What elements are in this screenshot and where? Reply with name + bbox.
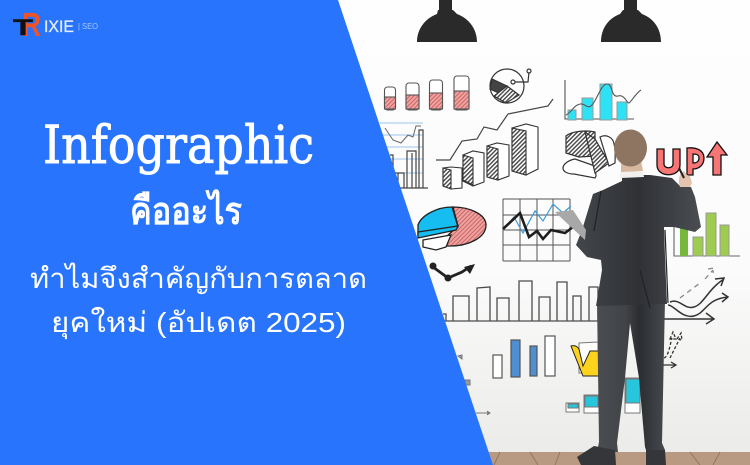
logo bbox=[13, 6, 98, 43]
heading: คืออะไร: คืออะไร bbox=[130, 189, 243, 233]
logo wordmark: IXIE bbox=[44, 17, 74, 36]
sketch trend arrows bbox=[662, 268, 728, 368]
clipboard bbox=[555, 210, 586, 240]
wood floor bbox=[480, 452, 750, 465]
hand holding marker bbox=[679, 171, 692, 187]
outlined bar chart bbox=[443, 281, 601, 321]
person in suit seen from behind bbox=[555, 130, 701, 465]
head bbox=[614, 130, 647, 166]
black squiggle arrow bbox=[430, 262, 475, 282]
icon: yellow folder bbox=[571, 342, 600, 376]
beakers chart bbox=[384, 76, 469, 110]
sketch pie chart with pointer bbox=[490, 69, 531, 103]
cyan bar chart with curve bbox=[565, 80, 641, 120]
sleeve crease bbox=[594, 191, 668, 308]
wall background bbox=[330, 0, 750, 453]
jacket bbox=[576, 175, 701, 306]
sketch grid line chart bbox=[503, 199, 573, 261]
logo mark: T bbox=[13, 15, 34, 40]
subheading line 2: ยุคใหม่ (อัปเดต 2025) bbox=[51, 306, 346, 340]
sketch 3D pie chart bbox=[563, 131, 615, 178]
small cyan blocks bbox=[566, 378, 640, 413]
legs bbox=[597, 300, 665, 452]
title: Infographic: Infographic bbox=[43, 116, 314, 176]
icon: ceiling lamp right bbox=[601, 0, 661, 42]
colored pie chart bbox=[418, 207, 486, 250]
logo divider and SEO: | SEO bbox=[78, 21, 98, 31]
red UP arrow lettering bbox=[657, 142, 727, 175]
logo mark: R bbox=[22, 6, 41, 43]
logo mark bbox=[13, 6, 41, 43]
left line and bar chart bbox=[370, 123, 428, 188]
blue diagonal panel bbox=[0, 0, 493, 465]
subheading line 1: ทำไมจึงสำคัญกับการตลาด bbox=[30, 263, 367, 294]
rising line chart bbox=[436, 99, 553, 160]
white and blue bars bbox=[493, 336, 555, 378]
shirt collar bbox=[620, 171, 644, 178]
3D bar chart bbox=[443, 124, 538, 189]
green bar chart bbox=[674, 213, 740, 256]
icon: ceiling lamp left bbox=[417, 0, 477, 42]
neck bbox=[621, 160, 643, 172]
small gray arrow bbox=[458, 355, 490, 415]
shoes bbox=[577, 446, 666, 465]
